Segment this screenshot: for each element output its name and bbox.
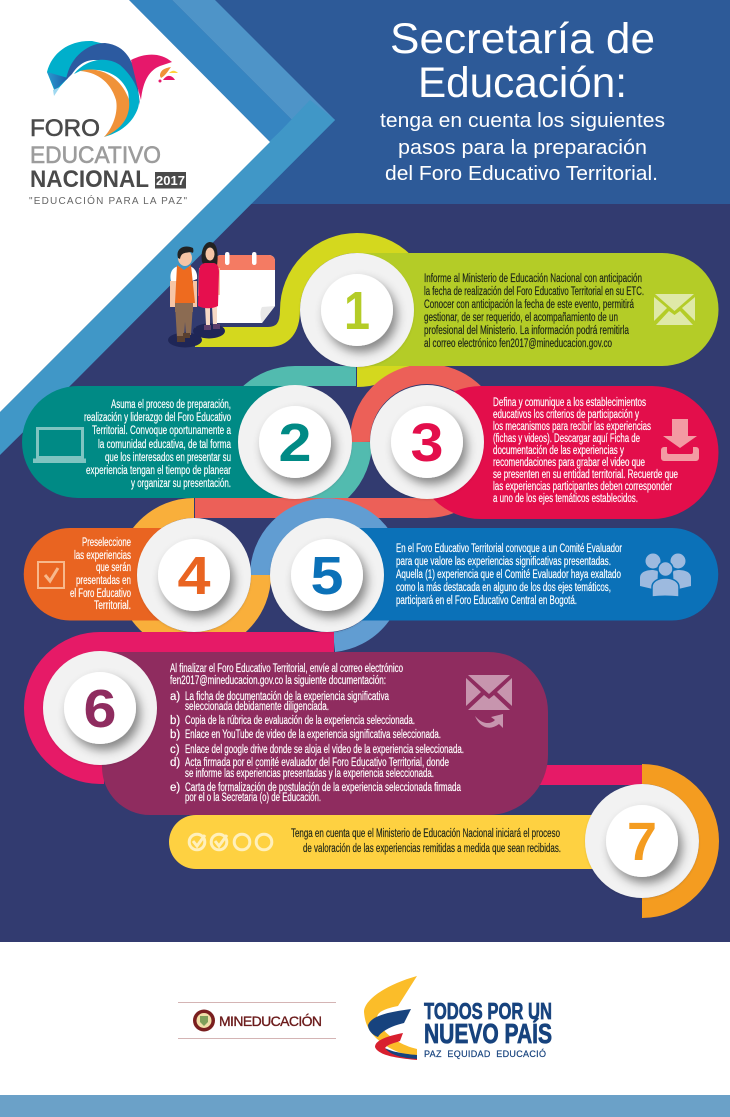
- text: step 4: que serán: [96, 562, 131, 574]
- text: step 6: Enlace del google drive donde se aloja el video de la experiencia seleccionada.: [185, 744, 464, 756]
- icon: laptop: [33, 428, 86, 463]
- icon: bird: [47, 41, 178, 137]
- logo text: EDUCATIVO: EDUCATIVO: [30, 142, 161, 169]
- circle: number 6: 6: [84, 679, 116, 739]
- text: step 5: como la más destacada en alguno de los dos ejes temáticos,: [396, 582, 611, 594]
- logo text: FORO: FORO: [30, 115, 100, 142]
- panel: step 5: [270, 518, 718, 632]
- text: step 3: educativos los criterios de participación y: [493, 409, 639, 421]
- text: step 6: se informe las experiencias presentadas y la experiencia seleccionada.: [185, 768, 434, 780]
- text: step 3: a uno de los ejes temáticos establecidos.: [493, 493, 638, 505]
- panel: step 4: [24, 518, 251, 632]
- connecting ribbon rings: [34, 243, 709, 908]
- text: step 3: Defina y comunique a los establecimientos: [493, 397, 646, 409]
- circle: number 2: 2: [278, 413, 312, 473]
- icon: calendar: [215, 252, 275, 323]
- title: [380, 15, 665, 185]
- text: step 4: [70, 537, 131, 612]
- circle: number 2: [238, 385, 352, 499]
- header band: [0, 0, 730, 204]
- logo badge: 2017: 2017: [156, 173, 185, 188]
- icon: flag swoosh: [364, 976, 417, 1060]
- text: step 5: Aquella (1) experiencia que el Comité Evaluador haya exaltado: [396, 569, 621, 581]
- text: step 5: En el Foro Educativo Territorial convoque a un Comité Evaluador: [396, 543, 622, 555]
- text: TODOS POR UN: TODOS POR UN: [424, 998, 552, 1024]
- illustration: people and calendar: [168, 242, 275, 348]
- header chevrons: [0, 0, 335, 455]
- text: step 2: experiencia tengan el tiempo de planear: [86, 465, 231, 477]
- text: step 6: Al finalizar el Foro Educativo Territorial, envíe al correo electrónico: [170, 663, 403, 675]
- text: step 2: Asuma el proceso de preparación,: [111, 399, 231, 411]
- text: step 3: documentación de las experiencias y: [493, 445, 624, 457]
- background: navy body: [0, 204, 730, 942]
- logo tagline: "EDUCACIÓN PARA LA PAZ": [29, 194, 187, 207]
- circle: number 3: 3: [410, 413, 444, 473]
- panel: step 2: [22, 385, 352, 499]
- icon: checkbox: [38, 562, 64, 588]
- text: PAZ EQUIDAD EDUCACIÓ: PAZ EQUIDAD EDUCACIÓ: [424, 1049, 546, 1059]
- panel: step 6: [43, 651, 548, 815]
- text: step 5: participará en el Foro Educativo Central en Bogotá.: [396, 595, 577, 607]
- white logo panel: [0, 0, 270, 412]
- text: step 2: y organizar su presentación.: [131, 478, 231, 490]
- title: Secretaría de: [390, 15, 655, 63]
- text: step 1: al correo electrónico fen2017@mineducacion.gov.co: [424, 338, 612, 350]
- text: step 1: gestionar, de ser requerido, el acompañamiento de un: [424, 312, 618, 324]
- logo text: NACIONAL: NACIONAL: [30, 166, 149, 193]
- text: step 1: Conocer con anticipación la fecha de este evento, permitirá: [424, 299, 634, 311]
- text: step 6: por el o la Secretaria (o) de Educación.: [185, 792, 321, 804]
- text: step 6: Acta firmada por el comité evaluador del Foro Educativo Territorial, donde: [185, 757, 449, 769]
- text: step 6: La ficha de documentación de la experiencia significativa: [185, 691, 389, 703]
- circle: number 7: 7: [627, 812, 657, 872]
- text: step 2: [84, 399, 231, 490]
- logo: Todos por un nuevo país: [364, 976, 552, 1060]
- text: step 7: Tenga en cuenta que el Ministerio de Educación Nacional iniciará el proceso: [291, 828, 560, 840]
- text: step 3: recomendaciones para grabar el video que: [493, 457, 645, 469]
- text: step 2: la comunidad educativa, de tal forma: [98, 439, 231, 451]
- icon: check circles: [189, 834, 272, 850]
- icon: envelope: [654, 294, 695, 325]
- title: pasos para la preparación: [398, 137, 647, 159]
- text: step 6: d): [170, 757, 180, 769]
- title: Educación:: [418, 59, 627, 107]
- circle: number 1: 1: [344, 281, 370, 341]
- panel: step 7: [169, 784, 699, 898]
- icon: email forward: [466, 675, 512, 728]
- text: step 4: las experiencias: [74, 550, 131, 562]
- text: step 3: (fichas y videos). Descargar aquí Ficha de: [493, 433, 640, 445]
- circle: number 7: [585, 784, 699, 898]
- text: step 6: b): [170, 715, 180, 727]
- shadows: [168, 332, 202, 348]
- icon: group of people: [640, 554, 691, 597]
- circle: number 6: [43, 651, 157, 765]
- circle: number 3: [370, 385, 484, 499]
- text: step 6: a): [170, 691, 180, 703]
- footer: blue bar: [0, 1095, 730, 1117]
- panel: step 3: [370, 385, 718, 519]
- person: girl: [198, 242, 220, 330]
- text: NUEVO PAÍS: NUEVO PAÍS: [424, 1018, 552, 1049]
- text: step 4: presentadas en: [76, 575, 131, 587]
- text: step 6: b): [170, 729, 180, 741]
- text: step 7: [291, 828, 561, 855]
- panel: step 1: [300, 253, 718, 367]
- text: MINEDUCACIÓN: MINEDUCACIÓN: [219, 1013, 322, 1029]
- text: step 6: seleccionada debidamente diligenciada.: [185, 701, 329, 713]
- circle: number 4: [137, 518, 251, 632]
- text: step 7: de valoración de las experiencias remitidas a medida que sean recibidas.: [303, 843, 561, 855]
- icon: download: [661, 419, 699, 461]
- text: step 2: realización y liderazgo del Foro Educativo: [84, 412, 231, 424]
- text: step 6: Enlace en YouTube de video de la experiencia significativa seleccionada.: [185, 729, 441, 741]
- text: step 6: Carta de formalización de postulación de la experiencia seleccionada firmada: [185, 782, 461, 794]
- text: step 2: Territorial. Convoque oportunamente a: [92, 425, 231, 437]
- icon: national seal: [193, 1010, 215, 1032]
- text: step 4: Territorial.: [94, 600, 131, 612]
- text: step 6: [170, 663, 464, 804]
- text: step 2: que los interesados en presentar su: [105, 452, 231, 464]
- text: step 6: c): [170, 744, 180, 756]
- circle: number 1: [300, 253, 414, 367]
- text: step 5: [396, 543, 622, 607]
- text: step 4: Preseleccione: [82, 537, 131, 549]
- circle: number 5: [270, 518, 384, 632]
- text: step 1: profesional del Ministerio. La información podrá remitirla: [424, 325, 629, 337]
- text: step 3: [493, 397, 678, 505]
- text: step 6: Copia de la rúbrica de evaluación de la experiencia seleccionada.: [185, 715, 415, 727]
- text: step 1: [424, 273, 644, 350]
- logo: Foro Educativo Nacional: [29, 41, 187, 207]
- text: step 6: fen2017@mineducacion.gov.co la siguiente documentación:: [170, 675, 386, 687]
- text: step 3: los mecanismos para recibir las experiencias: [493, 421, 651, 433]
- circle: number 5: 5: [310, 546, 344, 606]
- footer: white panel: [0, 942, 730, 1095]
- text: step 1: Informe al Ministerio de Educación Nacional con anticipación: [424, 273, 642, 285]
- text: step 6: e): [170, 782, 180, 794]
- text: step 4: el Foro Educativo: [70, 588, 131, 600]
- text: step 5: para que valore las experiencias significativas presentadas.: [396, 556, 611, 568]
- title: tenga en cuenta los siguientes: [380, 110, 665, 132]
- circle: number 4: 4: [178, 546, 210, 606]
- title: del Foro Educativo Territorial.: [385, 163, 658, 185]
- person: boy: [170, 246, 197, 342]
- logo: Mineducación: [178, 1002, 336, 1039]
